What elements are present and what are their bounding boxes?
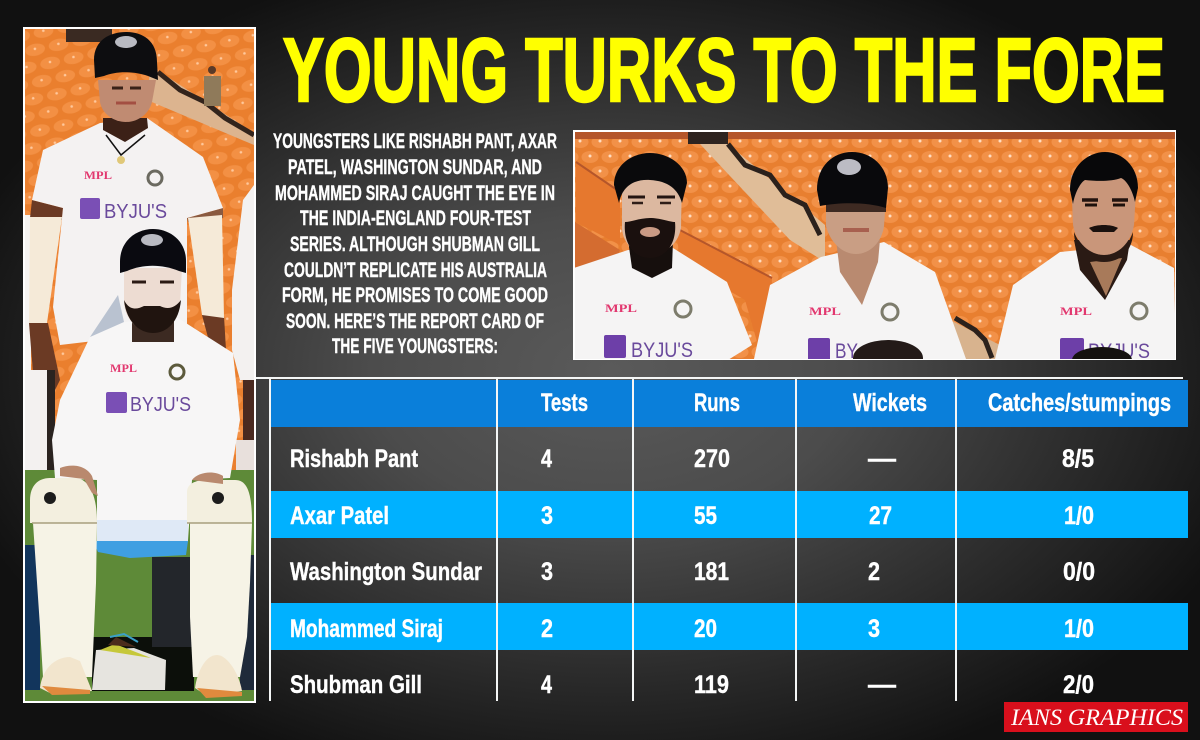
- highlighted row: Axar Patel: [271, 491, 1188, 538]
- logo: MPL: MPL: [1060, 304, 1092, 318]
- row: Washington Sundar: 181: [694, 558, 729, 586]
- intro text block: COULDN’T REPLICATE HIS AUSTRALIA: [284, 259, 547, 282]
- table header labels: Runs: [694, 389, 740, 417]
- row: Axar Patel: 3: [541, 502, 553, 530]
- intro text block: THE INDIA-ENGLAND FOUR-TEST: [300, 207, 531, 230]
- row: Mohammed Siraj: Mohammed Siraj: [290, 615, 443, 643]
- neighbouring players: [25, 185, 254, 490]
- row: Shubman Gill: Shubman Gill: [290, 671, 422, 699]
- row: Washington Sundar: 0/0: [1063, 558, 1095, 586]
- player: Shubman Gill: [754, 152, 966, 376]
- logo: BYJU'S: BYJU'S: [631, 339, 693, 362]
- row: Axar Patel: 55: [694, 502, 717, 530]
- logo: BYJU'S: BYJU'S: [104, 201, 167, 223]
- stadium stairs: [66, 29, 254, 145]
- table header labels: Wickets: [853, 389, 927, 417]
- row: Shubman Gill: 119: [694, 671, 729, 699]
- row: Washington Sundar: 2: [868, 558, 880, 586]
- stadium stairs: [688, 132, 1000, 359]
- photo: Siraj, Gill and Axar: [573, 130, 1176, 376]
- row: Shubman Gill: [290, 671, 1094, 699]
- logo: BYJU'S: BYJU'S: [130, 394, 191, 416]
- highlighted row: Mohammed Siraj: [271, 603, 1188, 650]
- logo: MPL: MPL: [84, 168, 112, 182]
- player: Mohammed Siraj: [574, 153, 752, 362]
- field: [25, 470, 254, 705]
- logo: BYJU'S: [604, 335, 692, 358]
- row: Washington Sundar: [290, 558, 1095, 586]
- stadium railing: [575, 162, 772, 345]
- row: Washington Sundar: 3: [541, 558, 553, 586]
- logo: BYJU'S: BYJU'S: [1088, 340, 1150, 363]
- table header labels: Tests: [541, 389, 588, 417]
- table header labels: [541, 389, 1171, 417]
- row: Mohammed Siraj: 1/0: [1064, 615, 1094, 643]
- table header band: [271, 380, 1188, 427]
- row: Rishabh Pant: 8/5: [1062, 445, 1094, 473]
- intro text block: MOHAMMED SIRAJ CAUGHT THE EYE IN: [275, 182, 555, 205]
- row: Shubman Gill: 4: [541, 671, 552, 699]
- row: Axar Patel: 1/0: [1064, 502, 1094, 530]
- stats table: [256, 377, 1188, 701]
- intro text block: YOUNGSTERS LIKE RISHABH PANT, AXAR: [273, 130, 557, 153]
- intro text block: [273, 130, 557, 358]
- player: Axar Patel: [995, 152, 1176, 373]
- intro text block: SOON. HERE’S THE REPORT CARD OF: [286, 310, 544, 333]
- row: Mohammed Siraj: 20: [694, 615, 717, 643]
- row: Mohammed Siraj: [290, 615, 1094, 643]
- player: Washington Sundar: [25, 32, 226, 400]
- row: Rishabh Pant: 4: [541, 445, 552, 473]
- intro text block: THE FIVE YOUNGSTERS:: [332, 335, 498, 358]
- logo: BYJU'S: [1060, 338, 1150, 359]
- boots: [40, 655, 242, 698]
- logo: BYJU'S: [808, 338, 858, 359]
- kit on grass: [92, 634, 166, 690]
- photo: Sundar and Pant: [23, 27, 256, 705]
- row: Washington Sundar: Washington Sundar: [290, 558, 482, 586]
- row: Axar Patel: Axar Patel: [290, 502, 389, 530]
- credit badge: IANS GRAPHICS: [1010, 705, 1184, 730]
- logo: BYJU'S: BY: [835, 340, 858, 363]
- batting pads: [30, 466, 252, 677]
- intro text block: FORM, HE PROMISES TO COME GOOD: [282, 284, 548, 307]
- row: Mohammed Siraj: 2: [541, 615, 553, 643]
- row: Rishabh Pant: —: [868, 445, 896, 473]
- row: Rishabh Pant: [290, 445, 1094, 473]
- row: Rishabh Pant: 270: [694, 445, 730, 473]
- logo: MPL: MPL: [110, 361, 137, 375]
- row: Shubman Gill: 2/0: [1063, 671, 1094, 699]
- row: Mohammed Siraj: 3: [868, 615, 880, 643]
- row: Rishabh Pant: Rishabh Pant: [290, 445, 419, 473]
- row: Axar Patel: [290, 502, 1094, 530]
- intro text block: SERIES. ALTHOUGH SHUBMAN GILL: [290, 233, 540, 256]
- logo: BYJU'S: [106, 392, 190, 413]
- logo: MPL: MPL: [605, 301, 637, 315]
- player: Rishabh Pant: [52, 229, 240, 558]
- row: Axar Patel: 27: [869, 502, 892, 530]
- intro text block: PATEL, WASHINGTON SUNDAR, AND: [288, 156, 542, 179]
- table grid lines: [256, 377, 1183, 701]
- logo: BYJU'S: [80, 198, 166, 219]
- row: Shubman Gill: —: [868, 671, 896, 699]
- logo: MPL: MPL: [809, 304, 841, 318]
